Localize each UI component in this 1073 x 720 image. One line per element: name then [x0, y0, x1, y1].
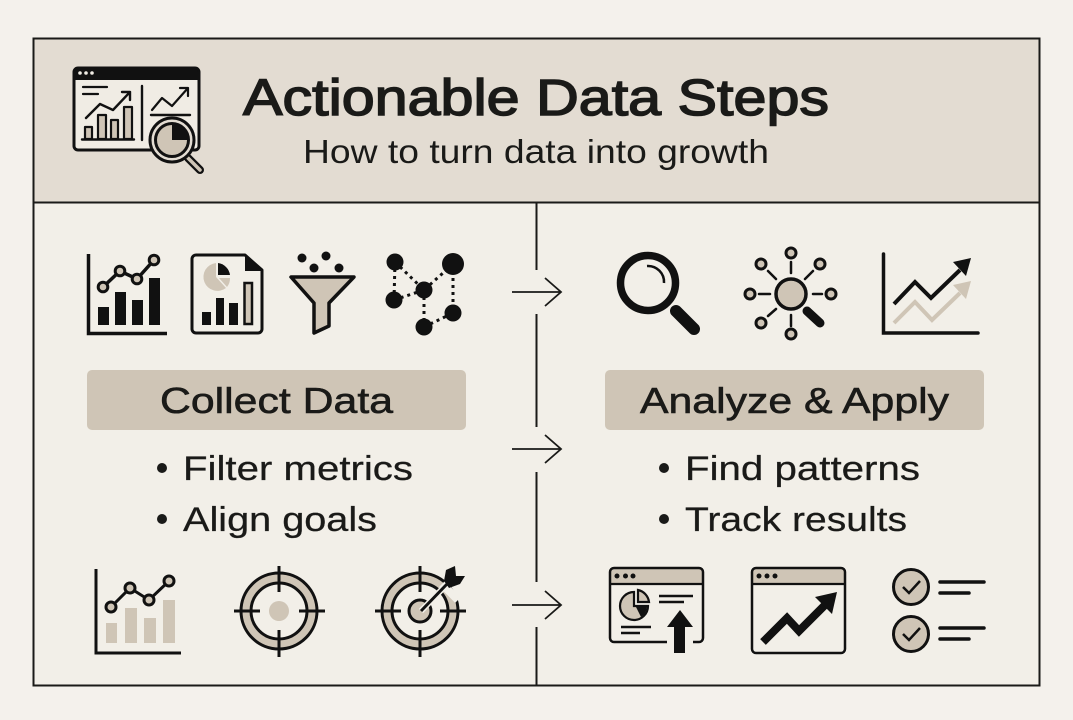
icon: checklist	[894, 570, 984, 652]
icon: target with arrow	[375, 566, 466, 657]
panel: collect data label	[87, 370, 466, 430]
arrow: top	[512, 278, 561, 306]
text block: analyze bullets: Find patterns	[685, 450, 920, 488]
text block: analyze bullets: Track results	[685, 501, 907, 539]
icon: network	[386, 253, 464, 336]
arrow: bottom	[512, 591, 561, 619]
vertical divider	[536, 203, 538, 685]
icon: hub and search	[745, 248, 836, 339]
icon: dashboard with magnifier	[74, 68, 200, 170]
text block: collect bullets: Filter metrics	[183, 450, 413, 488]
title: Actionable Data Steps	[243, 69, 829, 126]
panel: header band	[34, 40, 1038, 202]
icon: bar and line chart	[88, 254, 167, 334]
icon: crosshair target	[234, 566, 325, 657]
icon: growth chart	[884, 254, 978, 333]
icon: tan bar chart	[96, 569, 181, 653]
text block: collect bullets	[157, 450, 413, 539]
icon: report window with upload arrow	[610, 568, 703, 653]
panel: analyze and apply label: Analyze & Apply	[640, 380, 949, 421]
text block: collect bullets: Align goals	[183, 501, 377, 539]
icon: funnel	[291, 252, 354, 333]
arrow: middle	[512, 435, 561, 463]
icon: report document	[192, 255, 262, 333]
text block: analyze bullets	[659, 450, 920, 539]
icon: browser growth arrow	[752, 568, 845, 653]
subtitle: How to turn data into growth	[303, 133, 769, 170]
panel: analyze and apply label	[605, 370, 984, 430]
icon: magnifier	[620, 256, 694, 329]
panel: collect data label: Collect Data	[160, 380, 394, 421]
